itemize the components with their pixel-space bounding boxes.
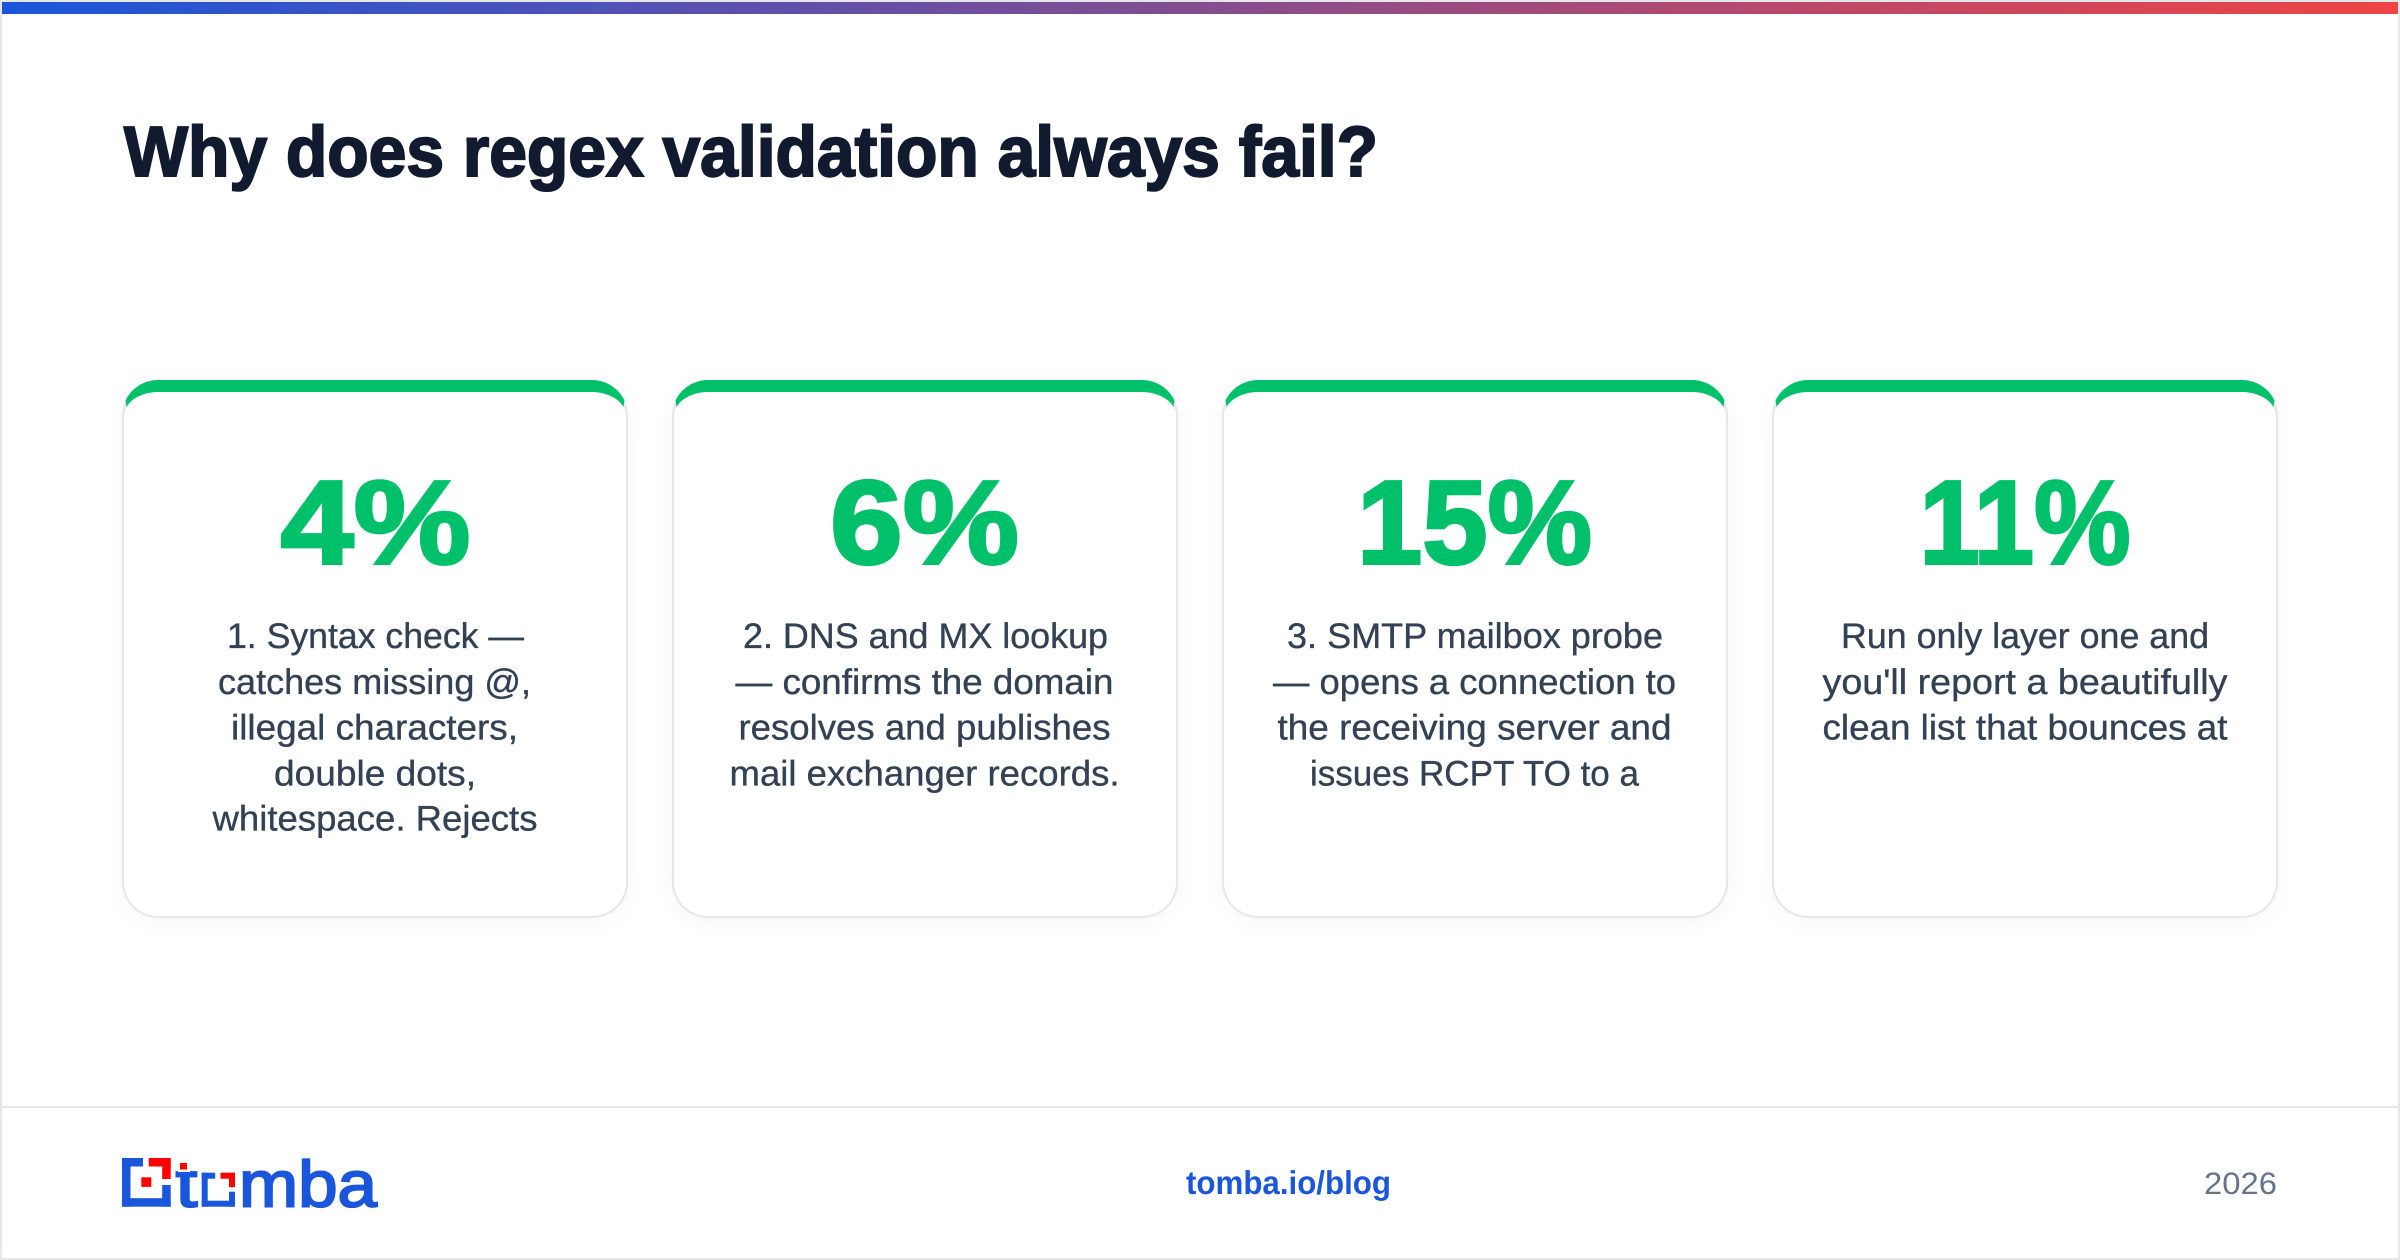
logo wordmark bbox=[176, 1148, 378, 1221]
description: run only layer one: Run only layer one and bbox=[1841, 616, 2209, 656]
description: syntax check: whitespace. Rejects bbox=[211, 798, 538, 838]
description: DNS and MX lookup bbox=[730, 616, 1120, 794]
description: SMTP mailbox probe: — opens a connection to bbox=[1273, 662, 1676, 702]
description: DNS and MX lookup: — confirms the domain bbox=[736, 662, 1114, 702]
card 2 bbox=[672, 380, 1178, 918]
stat: 6%: 6% bbox=[830, 456, 1019, 590]
footer divider bbox=[2, 1106, 2398, 1108]
description: DNS and MX lookup: resolves and publishes bbox=[738, 708, 1110, 748]
description: run only layer one: clean list that bounces at bbox=[1822, 708, 2228, 748]
top gradient bar bbox=[2, 2, 2398, 14]
logo mark bbox=[122, 1158, 171, 1207]
description: SMTP mailbox probe bbox=[1273, 616, 1676, 794]
description: DNS and MX lookup: mail exchanger records. bbox=[730, 754, 1120, 794]
logo wordmark: mba bbox=[239, 1148, 378, 1221]
card 4 bbox=[1772, 380, 2278, 918]
description: SMTP mailbox probe: the receiving server and bbox=[1278, 708, 1672, 748]
footer link: tomba.io/blog bbox=[1186, 1164, 1391, 1201]
footer year: 2026 bbox=[2204, 1166, 2277, 1201]
card 3 bbox=[1222, 380, 1728, 918]
description: DNS and MX lookup: 2. DNS and MX lookup bbox=[743, 616, 1108, 656]
stat: 15%: 15% bbox=[1357, 456, 1592, 590]
description: run only layer one bbox=[1822, 616, 2228, 748]
logo wordmark: t bbox=[176, 1148, 198, 1221]
description: run only layer one: you'll report a beautifully bbox=[1822, 662, 2228, 702]
description: syntax check: illegal characters, bbox=[231, 708, 518, 748]
card 1 bbox=[122, 380, 628, 918]
stat: 11%: 11% bbox=[1920, 456, 2130, 590]
stat: 4%: 4% bbox=[280, 456, 470, 590]
description: syntax check: double dots, bbox=[274, 754, 476, 794]
description: SMTP mailbox probe: 3. SMTP mailbox probe bbox=[1287, 616, 1663, 656]
description: syntax check: 1. Syntax check — bbox=[227, 616, 524, 656]
title: Why does regex validation always fail? bbox=[124, 113, 1378, 192]
description: syntax check: catches missing @, bbox=[218, 662, 531, 702]
footer logo: tomba bbox=[122, 1148, 378, 1221]
description: SMTP mailbox probe: issues RCPT TO to a bbox=[1310, 754, 1639, 794]
description: syntax check bbox=[211, 616, 538, 838]
